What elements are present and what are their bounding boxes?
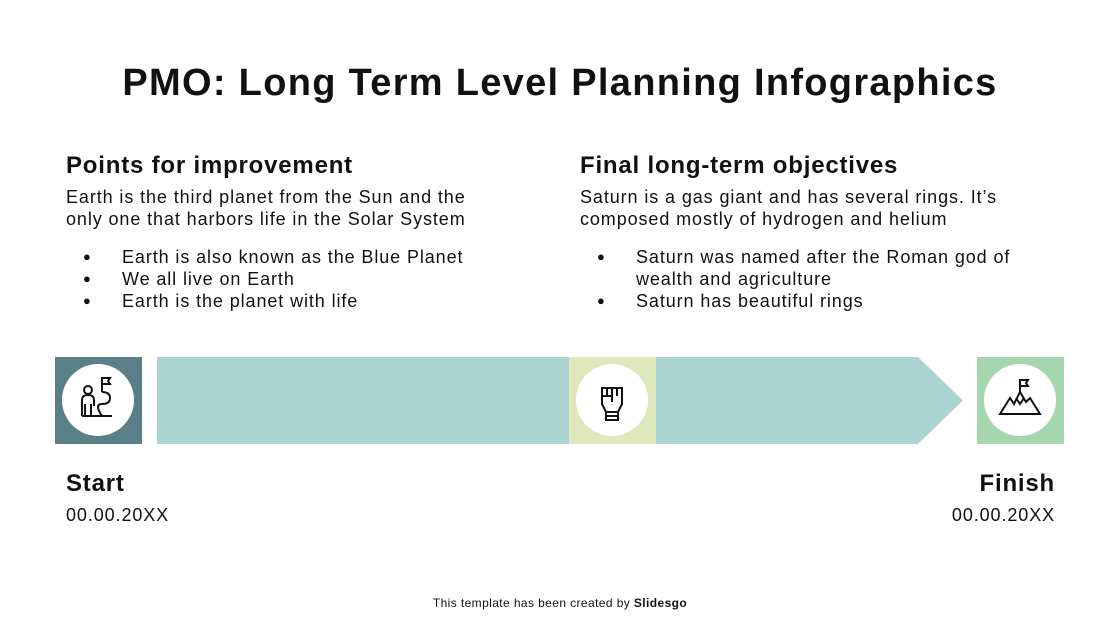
label: start [66,470,169,525]
bullet list: points [84,247,463,311]
bullet list: objectives: Saturn has beautiful rings [636,291,864,311]
icon: finish [977,357,1064,444]
bullet list: points: Earth is also known as the Blue Planet [122,247,463,267]
panel: points for improvement [66,152,466,311]
bullet list: objectives [598,247,1010,311]
label: finish: Finish [980,470,1055,497]
text: objectives body: Saturn is a gas giant and has several rings. It’s composed mostly of hydrogen and helium [580,187,997,229]
icon: start [55,357,142,444]
heading: objectives: Final long-term objectives [580,152,898,179]
text: points body: Earth is the third planet from the Sun and the [66,187,466,207]
label: start: Start [66,470,125,497]
bullet list: points: We all live on Earth [122,269,295,289]
icon: milestone [569,357,656,444]
label: finish [952,470,1055,525]
heading: points: Points for improvement [66,152,353,179]
bullet list: objectives: Saturn was named after the Roman god of wealth and agriculture [636,247,1010,289]
footer credit: This template has been created by Slidesgo [433,596,687,610]
text: points body: only one that harbors life in the Solar System [66,209,466,229]
label: start: 00.00.20XX [66,505,169,525]
text: points body [66,187,466,229]
label: finish: 00.00.20XX [952,505,1055,525]
panel: final objectives [580,152,1010,311]
bullet list: points: Earth is the planet with life [122,291,358,311]
title: PMO: Long Term Level Planning Infographics [122,62,998,104]
